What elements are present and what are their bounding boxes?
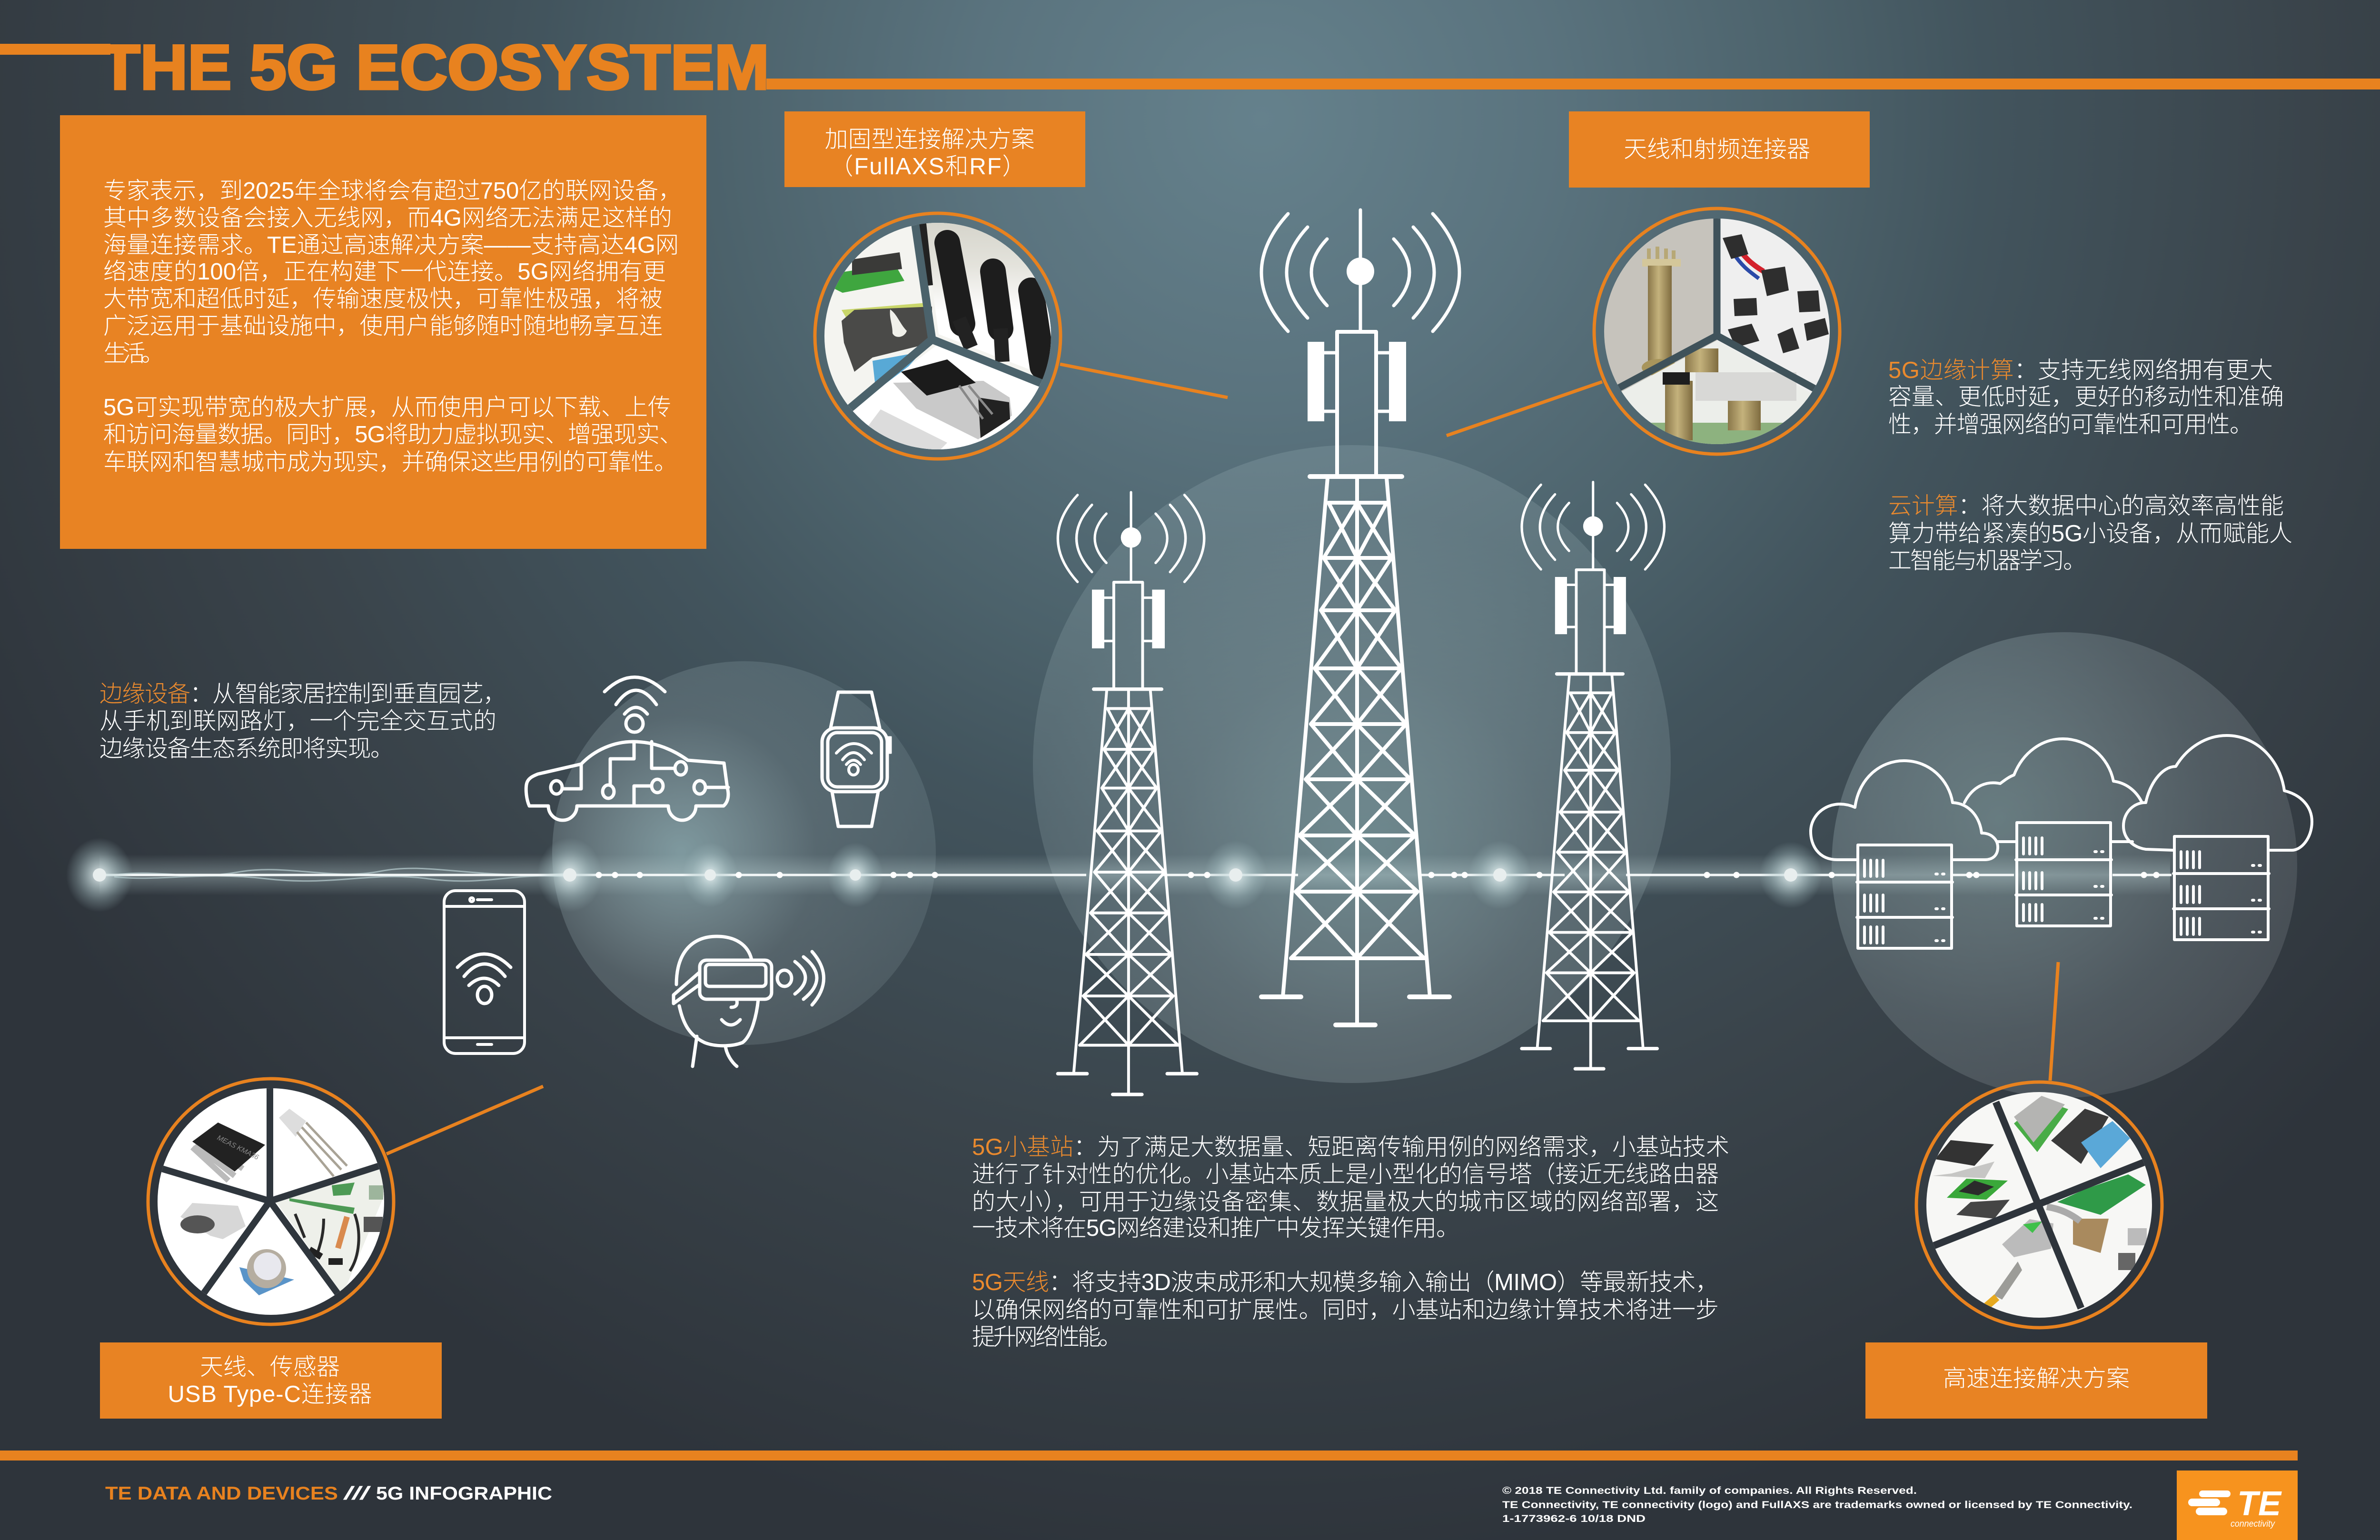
photo circle: high speed	[1916, 1082, 2162, 1328]
light circle: towers	[1033, 445, 1671, 1083]
text: 5G antenna: 5G天线：将支持3D波束成形和大规模多输入输出（MIMO）等最新技术，	[972, 1270, 1719, 1295]
text: 5G small cell: 的大小），可用于边缘设备密集、数据量极大的城市区域的网络部署，这	[972, 1189, 1719, 1215]
intro text: 专家表示，到2025年全球将会有超过750亿的联网设备，	[103, 178, 682, 204]
photo circle: antenna and RF	[1593, 207, 1841, 456]
footer title: 5G INFOGRAPHIC	[376, 1483, 552, 1504]
TE logo	[2177, 1470, 2298, 1540]
watch wifi	[836, 744, 872, 775]
text: 5G small cell: 进行了针对性的优化。小基站本质上是小型化的信号塔（接近无线路由器	[972, 1162, 1719, 1187]
text: 5G edge computing: 容量、更低时延，更好的移动性和准确	[1888, 384, 2284, 410]
panel: intro	[60, 115, 706, 549]
title rule left	[0, 44, 110, 55]
intro text: 生活。	[103, 341, 164, 367]
icon: smartwatch	[822, 692, 891, 826]
text: 5G small cell: 5G小基站：为了满足大数据量、短距离传输用例的网络需求，小基站技术	[972, 1134, 1729, 1160]
connector: edge devices	[387, 1086, 543, 1154]
connector: rugged	[1060, 364, 1228, 397]
label: antenna and RF: 天线和射频连接器	[1624, 137, 1810, 162]
intro text: 络速度的100倍，正在构建下一代连接。5G网络拥有更	[103, 259, 666, 285]
icon: connected car	[526, 677, 728, 820]
text: cloud computing: 算力带给紧凑的5G小设备，从而赋能人	[1888, 521, 2292, 546]
text: 5G small cell	[972, 1134, 1729, 1241]
TE logo: connectivity	[2231, 1519, 2275, 1529]
light circle: clouds	[1832, 632, 2297, 1098]
label: antenna and RF	[1569, 111, 1870, 188]
photo circle: edge components	[148, 1079, 394, 1324]
signal nodes	[66, 838, 2156, 912]
intro text: 海量连接需求。TE通过高速解决方案——支持高达4G网	[103, 232, 679, 258]
text: 5G antenna	[972, 1270, 1719, 1350]
photo circle: rugged	[813, 211, 1062, 461]
signal line	[66, 838, 2172, 912]
text: 5G antenna: 以确保网络的可靠性和可扩展性。同时，小基站和边缘计算技术将进一步	[972, 1297, 1719, 1323]
label: high speed: 高速连接解决方案	[1943, 1366, 2130, 1391]
intro text: 车联网和智慧城市成为现实，并确保这些用例的可靠性。	[103, 449, 677, 475]
intro text: 大带宽和超低时延，传输速度极快，可靠性极强，将被	[103, 286, 663, 312]
icon: smartphone	[444, 891, 525, 1053]
text: edge devices: 边缘设备：从智能家居控制到垂直园艺，	[99, 681, 506, 707]
text: edge devices: 从手机到联网路灯，一个完全交互式的	[99, 708, 496, 734]
text: 5G antenna: 提升网络性能。	[972, 1324, 1122, 1350]
text: edge devices	[99, 681, 506, 762]
server racks	[1857, 823, 2269, 948]
connector: high speed	[2050, 962, 2058, 1081]
connector: antenna	[1447, 382, 1602, 436]
label: rugged connection	[784, 111, 1085, 187]
intro text: 其中多数设备会接入无线网，而4G网络无法满足这样的	[103, 205, 672, 231]
tower: left	[1058, 492, 1204, 1094]
footer title: TE DATA AND DEVICES	[105, 1483, 338, 1504]
intro text: 和访问海量数据。同时，5G将助力虚拟现实、增强现实、	[103, 422, 683, 447]
legal text: © 2018 TE Connectivity Ltd. family of companies. All Rights Reserved.	[1502, 1485, 1917, 1496]
text: cloud computing: 云计算：将大数据中心的高效率高性能	[1888, 493, 2284, 519]
label: antennas sensors usb: 天线、传感器	[200, 1354, 340, 1380]
legal text	[1502, 1485, 2132, 1524]
footer title: ///	[343, 1483, 372, 1504]
label: antennas sensors usb	[100, 1342, 442, 1419]
text: 5G edge computing: 性，并增强网络的可靠性和可用性。	[1888, 412, 2253, 437]
text: 5G small cell: 一技术将在5G网络建设和推广中发挥关键作用。	[972, 1215, 1459, 1241]
light circle: devices	[552, 661, 936, 1045]
label: high speed	[1865, 1342, 2207, 1419]
title: THE 5G ECOSYSTEM	[100, 32, 769, 103]
footer rule	[0, 1451, 2298, 1461]
phone wifi	[457, 954, 511, 1003]
tower: centre	[1261, 210, 1459, 1025]
footer title	[105, 1483, 552, 1504]
TE logo: TE	[2237, 1485, 2282, 1523]
legal text: TE Connectivity, TE connectivity (logo) and FullAXS are trademarks owned or licensed by TE Connectivity.	[1502, 1500, 2132, 1510]
tower: right	[1522, 482, 1665, 1069]
intro text: 广泛运用于基础设施中，使用户能够随时随地畅享互连	[103, 313, 663, 339]
icon: VR headset	[674, 936, 823, 1066]
icon: clouds with servers	[1811, 735, 2312, 948]
intro text	[103, 178, 683, 475]
text: edge devices: 边缘设备生态系统即将实现。	[99, 736, 394, 762]
label: antennas sensors usb: USB Type-C连接器	[168, 1381, 372, 1407]
car wifi	[605, 677, 665, 732]
label: rugged connection: 加固型连接解决方案	[824, 127, 1035, 152]
text: 5G edge computing: 5G边缘计算：支持无线网络拥有更大	[1888, 358, 2273, 383]
label: rugged connection: （FullAXS和RF）	[830, 154, 1027, 179]
text: cloud computing: 工智能与机器学习。	[1888, 548, 2086, 574]
legal text: 1-1773962-6 10/18 DND	[1502, 1513, 1646, 1524]
VR signal	[777, 952, 823, 1005]
text: 5G edge computing	[1888, 358, 2284, 437]
photo circle: edge components: MEAS KMA36	[216, 1133, 260, 1162]
title rule right	[766, 79, 2380, 89]
intro text: 5G可实现带宽的极大扩展，从而使用户可以下载、上传	[103, 395, 671, 420]
text: cloud computing	[1888, 493, 2292, 574]
